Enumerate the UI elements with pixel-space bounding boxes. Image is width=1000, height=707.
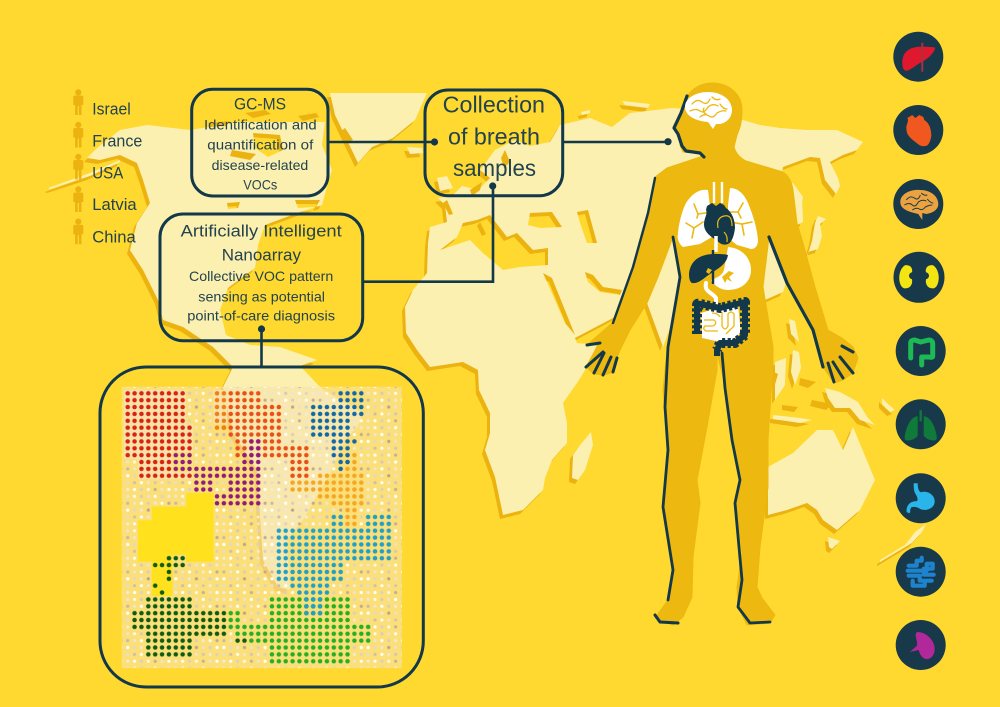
organ: trachea [714,182,722,203]
box: GC-MS: VOCs [243,176,277,192]
connector: nanoarray to collection [362,182,496,282]
icon: colon [896,326,946,376]
organ: esophagus [714,236,718,252]
icon: heart [893,105,943,155]
icon: brain [893,179,943,229]
box: Collection of breath samples: Collection [443,92,545,118]
organ: brain [685,92,732,129]
box: GC-MS [192,89,328,196]
legend: Latvia: Latvia [92,195,137,214]
box: GC-MS: Identification and [204,116,317,132]
body outline strokes [586,96,853,623]
organ: duodenum [706,283,716,304]
connector: GC-MS to collection [328,138,438,146]
connector: nanoarray to dot grid [258,325,265,367]
box: Collection of breath samples: of breath [448,123,540,149]
body silhouette [586,83,858,625]
human body [586,83,858,625]
organ: liver [689,250,728,284]
icon: stomach [896,473,946,523]
box: GC-MS: disease-related [212,157,308,173]
box: Artificially Intelligent Nanoarray: point-of-care diagnosis [187,308,335,324]
organ: stomach [711,247,751,290]
icon: lungs [896,399,946,449]
legend: USA: USA [92,163,124,182]
box: GC-MS: quantification of [207,136,313,152]
box: Artificially Intelligent Nanoarray: sensing as potential [198,289,325,305]
legend: countries [73,89,142,246]
box: Collection of breath samples: samples [453,155,536,181]
icon: liver [893,32,943,82]
legend: Latvia [73,186,137,214]
legend: Israel: Israel [92,99,131,118]
legend: Israel [73,89,131,118]
organ: small intestine [701,305,741,341]
organ: heart [704,203,735,245]
organ: colon [697,302,745,356]
box: Artificially Intelligent Nanoarray: Collective VOC pattern [189,268,333,284]
box: Artificially Intelligent Nanoarray [160,214,363,341]
dot matrix [122,387,402,667]
icon: spleen [896,620,946,670]
legend: China: China [92,227,136,246]
world map [45,93,926,594]
legend: France: France [92,132,142,151]
box: Artificially Intelligent Nanoarray: Artificially Intelligent [181,222,342,241]
legend: China [73,218,136,246]
icon: kidneys [894,252,944,303]
box: Artificially Intelligent Nanoarray: Nanoarray [222,246,301,265]
legend: France [73,122,142,151]
connector: collection to head [563,138,672,145]
box: Collection of breath samples [425,90,563,196]
legend: USA [73,154,124,182]
box: GC-MS: GC-MS [234,94,286,113]
panel: nanoarray dot grid [100,367,423,687]
organ: lungs [678,188,758,249]
icon: small intestine [896,547,946,597]
